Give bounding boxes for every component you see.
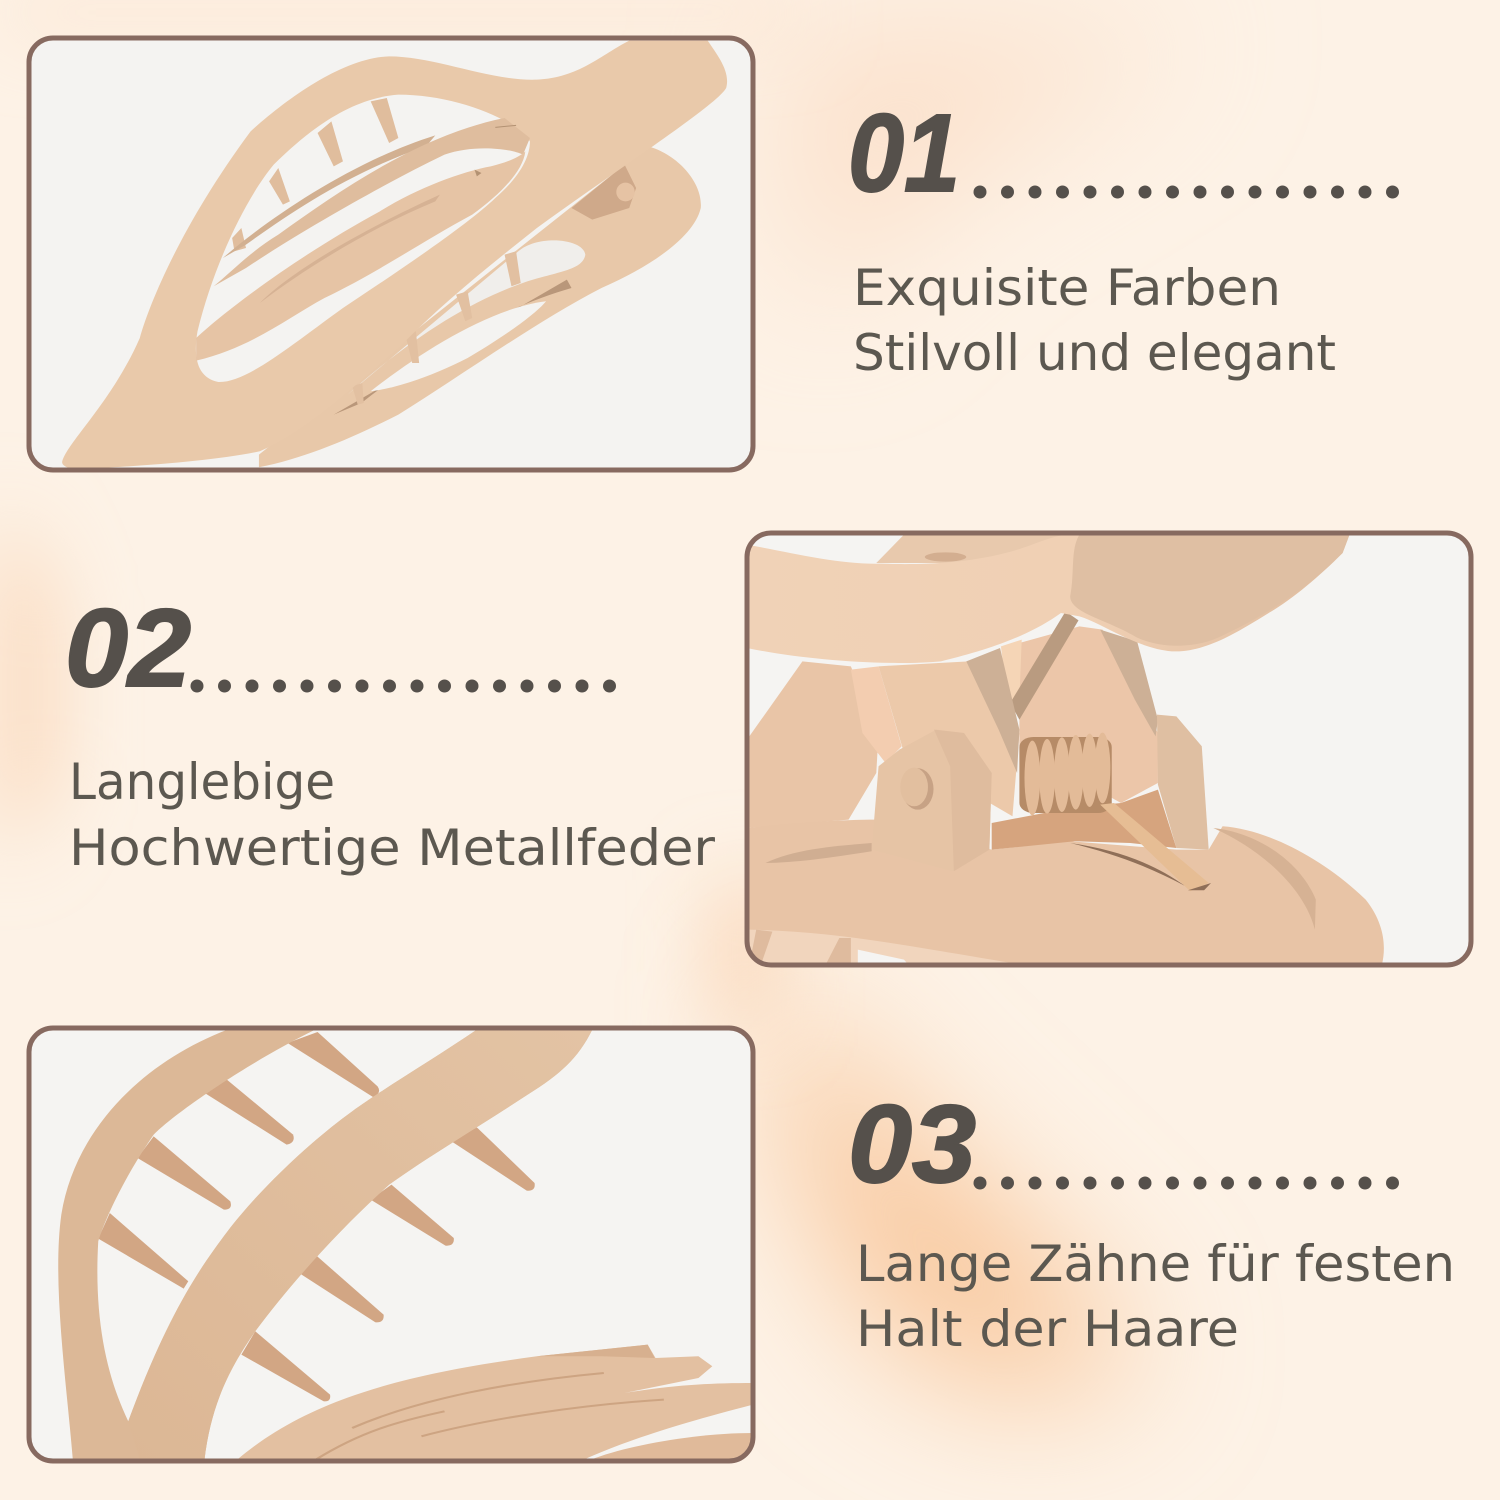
panel: photo of spring hinge bbox=[747, 533, 1471, 965]
heading: 02 bbox=[65, 587, 616, 710]
heading: 01: 01 bbox=[848, 92, 960, 215]
base under spring bbox=[992, 790, 1176, 850]
teeth bbox=[98, 1032, 535, 1401]
text block: 03: Halt der Haare bbox=[856, 1300, 1239, 1358]
outer arch and inner arm bbox=[58, 1030, 592, 1460]
dotted leader 02 bbox=[190, 680, 616, 692]
back upper clip bbox=[876, 536, 1061, 563]
heading: 01 bbox=[848, 92, 1399, 215]
heading: 03: 03 bbox=[848, 1083, 976, 1206]
text block: 03: Lange Zähne für festen bbox=[856, 1235, 1455, 1293]
top arm bbox=[747, 535, 1350, 663]
dotted leader 03 bbox=[974, 1176, 1399, 1190]
inner finger bbox=[196, 151, 525, 361]
text block: 02 bbox=[69, 753, 715, 877]
lower comb bbox=[237, 1345, 753, 1460]
back arm bbox=[747, 661, 879, 828]
lower body bbox=[747, 820, 1384, 965]
heading: 03 bbox=[848, 1083, 1399, 1206]
text block: 02: Hochwertige Metallfeder bbox=[69, 819, 715, 877]
right bracket bbox=[1157, 715, 1209, 850]
text block: 02: Langlebige bbox=[69, 753, 335, 811]
panel: photo of long teeth bbox=[29, 1028, 753, 1461]
left lever bbox=[879, 661, 1019, 816]
panel: photo of claw clip top view bbox=[29, 38, 753, 470]
spring wire bbox=[1100, 803, 1209, 891]
background bbox=[0, 6, 1167, 1455]
lower jaw bbox=[259, 146, 701, 467]
lower-left teeth bbox=[750, 930, 1008, 962]
centre plate bbox=[1019, 626, 1158, 803]
text block: 01 bbox=[853, 259, 1336, 382]
text block: 01: Stilvoll und elegant bbox=[853, 324, 1336, 382]
heading: 02: 02 bbox=[65, 587, 191, 710]
inner comb bands bbox=[214, 118, 530, 286]
dotted leader 01 bbox=[974, 186, 1399, 198]
inner window: back rib and teeth bbox=[232, 98, 398, 251]
left bracket with pin bbox=[874, 748, 991, 849]
text block: 03 bbox=[856, 1235, 1455, 1358]
text block: 01: Exquisite Farben bbox=[853, 259, 1281, 317]
upper body bbox=[62, 41, 727, 469]
spring bbox=[1019, 733, 1112, 815]
